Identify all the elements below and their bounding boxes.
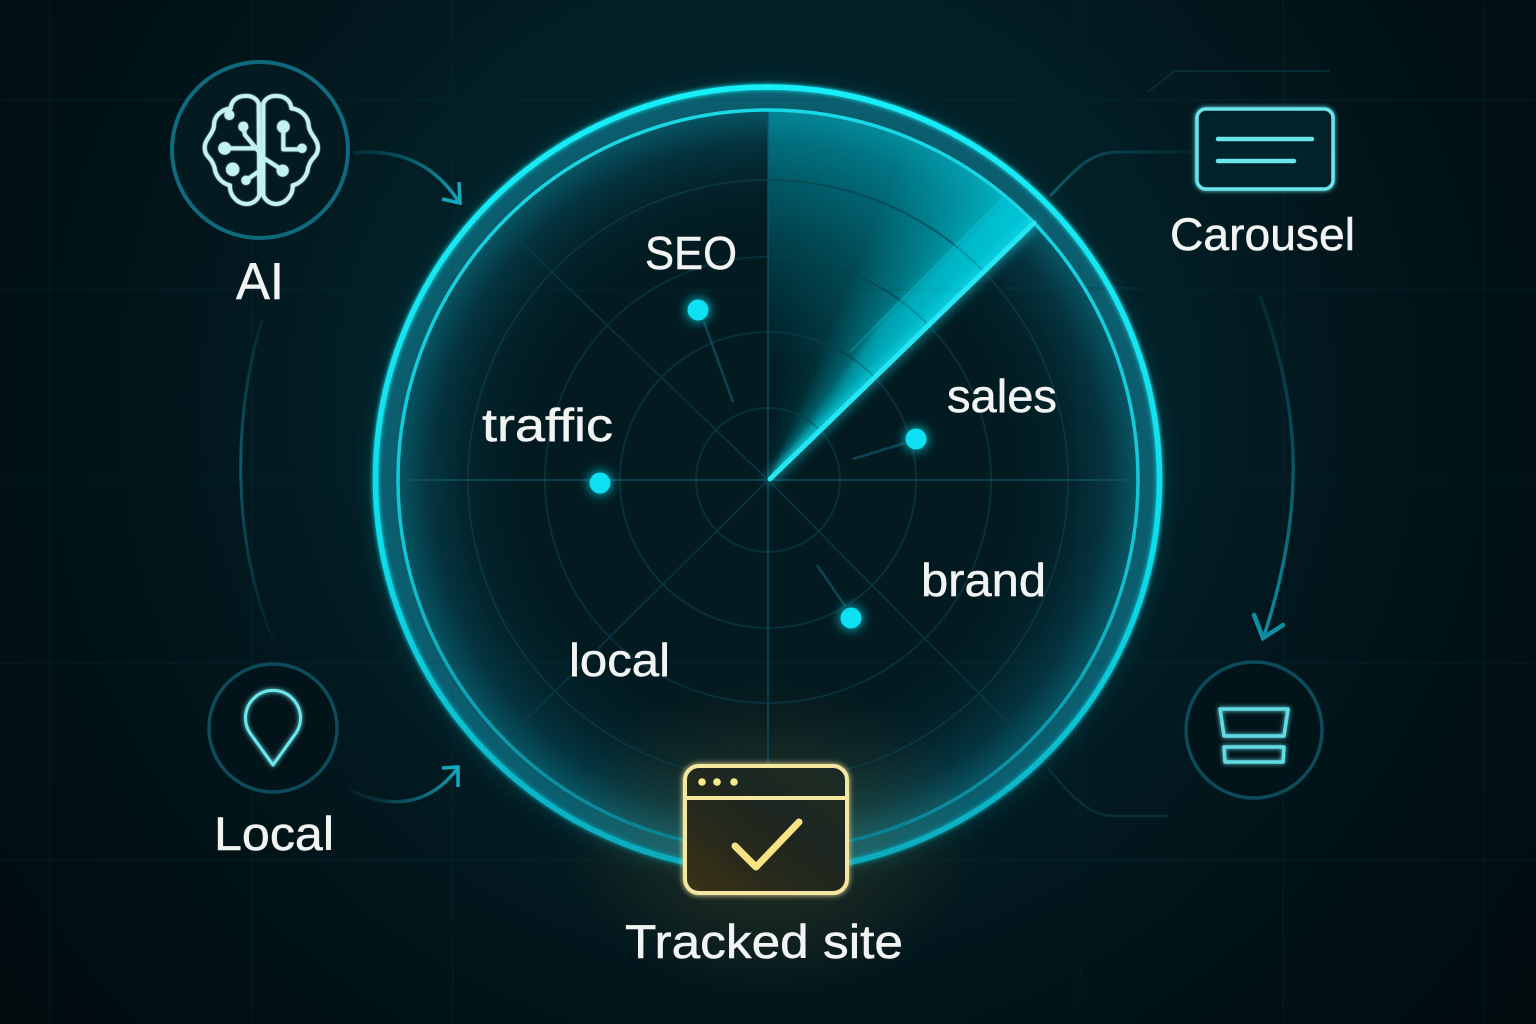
arrow: Local to radar [350,767,458,802]
label: brand: brand [921,554,1046,606]
label: local: local [569,634,670,686]
connector: radar to carousel [1050,152,1190,196]
AI circle [172,62,348,238]
connector: faint lower line [1047,767,1168,816]
label: SEO: SEO [645,227,737,279]
dot: SEO [688,300,708,320]
icon: carousel card [1197,109,1333,189]
label: Carousel: Carousel [1170,209,1355,260]
tracked site warm glow [560,680,980,1000]
icon: brain [205,96,318,204]
label: Local: Local [214,807,334,860]
radar inner ring [398,110,1138,850]
sweep bright band [790,197,1032,455]
Tracked site node [625,766,903,968]
icon: funnel shapes [1220,709,1288,762]
funnel circle [1186,662,1322,798]
Carousel node [1170,109,1355,260]
arrow: AI to radar [353,152,460,203]
connector: faint upper line [1148,71,1330,92]
dot connector lines [704,322,905,606]
dot: brand [840,608,862,628]
Local node [209,664,337,860]
icon: browser window [685,766,847,893]
Local circle [209,664,337,792]
radar grid [398,110,1138,780]
label: traffic: traffic [482,399,613,451]
label: AI: AI [236,253,284,311]
arc: Local to AI [241,320,273,640]
label: sales: sales [947,370,1057,422]
radar disc [375,87,1161,873]
funnel node [1186,662,1322,798]
radar sweep wedge [768,112,1031,476]
dot: traffic [590,472,610,494]
icon: location pin [246,690,301,765]
AI node [172,62,348,311]
label: Tracked site: Tracked site [625,915,903,968]
radar outer ring [376,87,1160,871]
dot: sales [906,428,926,450]
radar sweep line [770,223,1034,479]
arrow: Carousel to funnel [1254,296,1293,638]
